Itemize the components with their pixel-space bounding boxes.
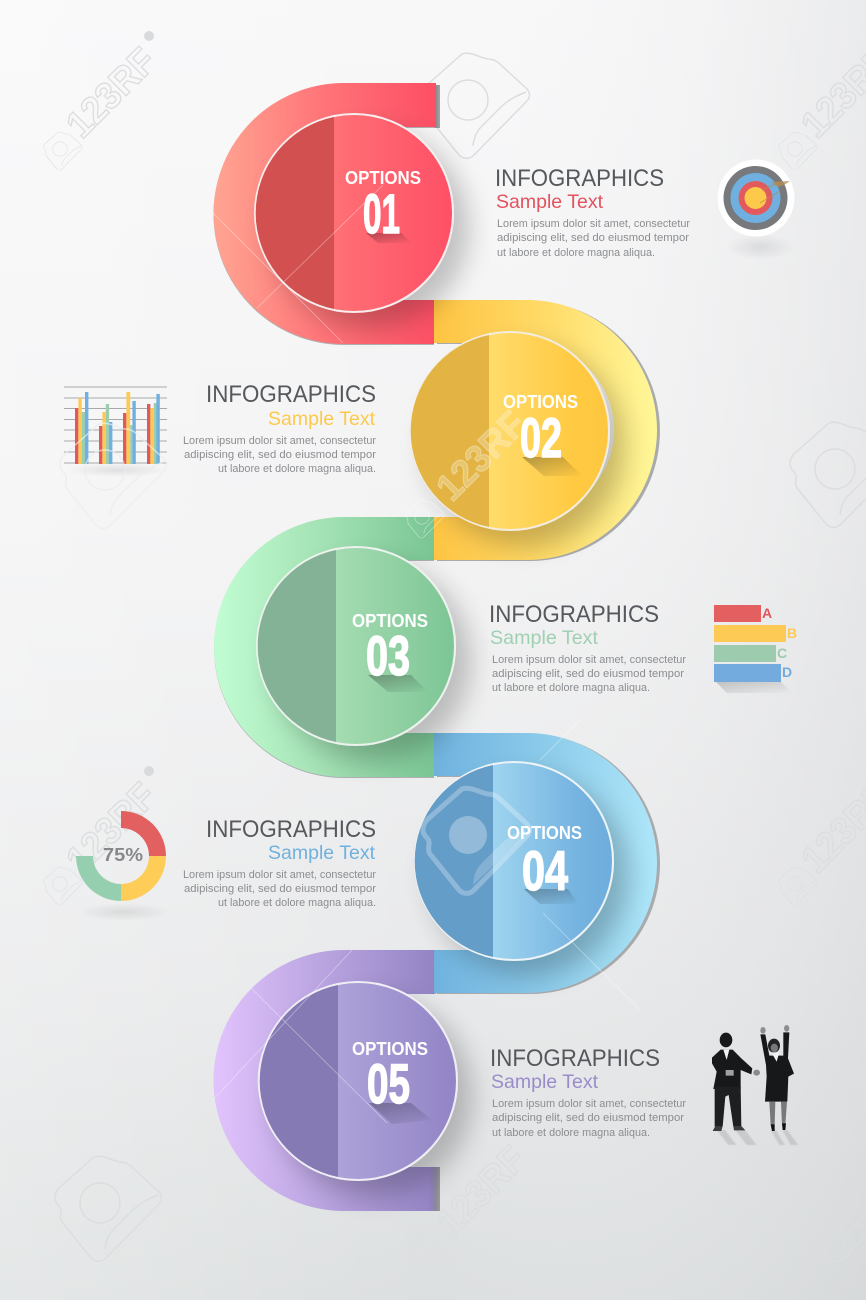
text block 2: Lorem ipsum dolor sit amet, consectetur xyxy=(183,435,376,447)
text block 4: ut labore et dolore magna aliqua. xyxy=(218,897,376,909)
text block 2: ut labore et dolore magna aliqua. xyxy=(218,463,376,475)
text block 5: Lorem ipsum dolor sit amet, consectetur xyxy=(492,1098,686,1110)
ribbon: segment 1 red xyxy=(213,83,440,345)
text block 1: ut labore et dolore magna aliqua. xyxy=(497,247,655,259)
circle 4 xyxy=(415,762,613,960)
label: options 01: OPTIONS xyxy=(345,168,421,188)
text: 123RF xyxy=(429,1138,535,1244)
text block 2: INFOGRAPHICS xyxy=(206,381,376,408)
text block 4: Lorem ipsum dolor sit amet, consectetur xyxy=(183,869,376,881)
label: options 04: OPTIONS xyxy=(507,823,582,843)
icon: stacked bars A B C D: A xyxy=(762,605,772,621)
number 05: 05 xyxy=(367,1052,410,1115)
text block 2: Sample Text xyxy=(268,408,376,430)
number 02: 02 xyxy=(520,406,562,469)
icon: business people silhouettes xyxy=(712,1025,798,1145)
ribbon: segment 2 yellow xyxy=(434,300,660,561)
text block 4: adipiscing elit, sed do eiusmod tempor xyxy=(184,883,376,895)
icon: stacked bars A B C D: C xyxy=(777,645,787,661)
text block 1 xyxy=(495,165,690,259)
number 04: 04 xyxy=(522,839,568,902)
label: options 05: OPTIONS xyxy=(352,1039,428,1059)
ribbon: segment 3 green xyxy=(214,517,434,778)
text block 1: INFOGRAPHICS xyxy=(495,165,664,192)
text block 4: INFOGRAPHICS xyxy=(206,816,376,843)
circle 5 xyxy=(259,982,457,1180)
text block 5 xyxy=(490,1045,686,1139)
text block 3: adipiscing elit, sed do eiusmod tempor xyxy=(492,668,684,680)
text block 1: Sample Text xyxy=(496,191,604,213)
number 01: 01 xyxy=(363,182,400,245)
text block 5: INFOGRAPHICS xyxy=(490,1045,660,1072)
text block 5: ut labore et dolore magna aliqua. xyxy=(492,1127,650,1139)
text block 3: ut labore et dolore magna aliqua. xyxy=(492,682,650,694)
icon: stacked bars A B C D xyxy=(714,605,797,693)
text: 123RF xyxy=(59,40,165,146)
number 03: 03 xyxy=(366,624,410,687)
text block 5: adipiscing elit, sed do eiusmod tempor xyxy=(492,1112,684,1124)
circle 1 xyxy=(255,114,453,312)
text: 123RF xyxy=(429,403,535,509)
text block 2 xyxy=(183,381,376,475)
text block 5: Sample Text xyxy=(491,1071,599,1093)
text block 2: adipiscing elit, sed do eiusmod tempor xyxy=(184,449,376,461)
icon: donut chart 75% xyxy=(76,811,170,921)
text: 123RF xyxy=(59,775,165,881)
circle 3 xyxy=(257,547,455,745)
label: options 03: OPTIONS xyxy=(352,611,428,631)
circle 2 xyxy=(411,332,609,530)
text block 4 xyxy=(183,816,376,909)
icon: stacked bars A B C D: D xyxy=(782,664,792,680)
label: 75%: 75% xyxy=(103,845,143,865)
label: options 02: OPTIONS xyxy=(503,392,578,412)
text block 4: Sample Text xyxy=(268,842,376,864)
ribbon: segment 4 blue xyxy=(434,733,660,994)
text block 3: Sample Text xyxy=(490,627,599,649)
text block 3: Lorem ipsum dolor sit amet, consectetur xyxy=(492,654,686,666)
text block 3: INFOGRAPHICS xyxy=(489,601,659,628)
icon: bar chart xyxy=(64,387,168,477)
text block 3 xyxy=(489,601,686,694)
icon: target xyxy=(718,160,794,260)
text block 1: Lorem ipsum dolor sit amet, consectetur xyxy=(497,218,690,230)
icon: stacked bars A B C D: B xyxy=(787,625,797,641)
text block 1: adipiscing elit, sed do eiusmod tempor xyxy=(497,232,689,244)
ribbon: segment 5 purple xyxy=(213,950,440,1211)
